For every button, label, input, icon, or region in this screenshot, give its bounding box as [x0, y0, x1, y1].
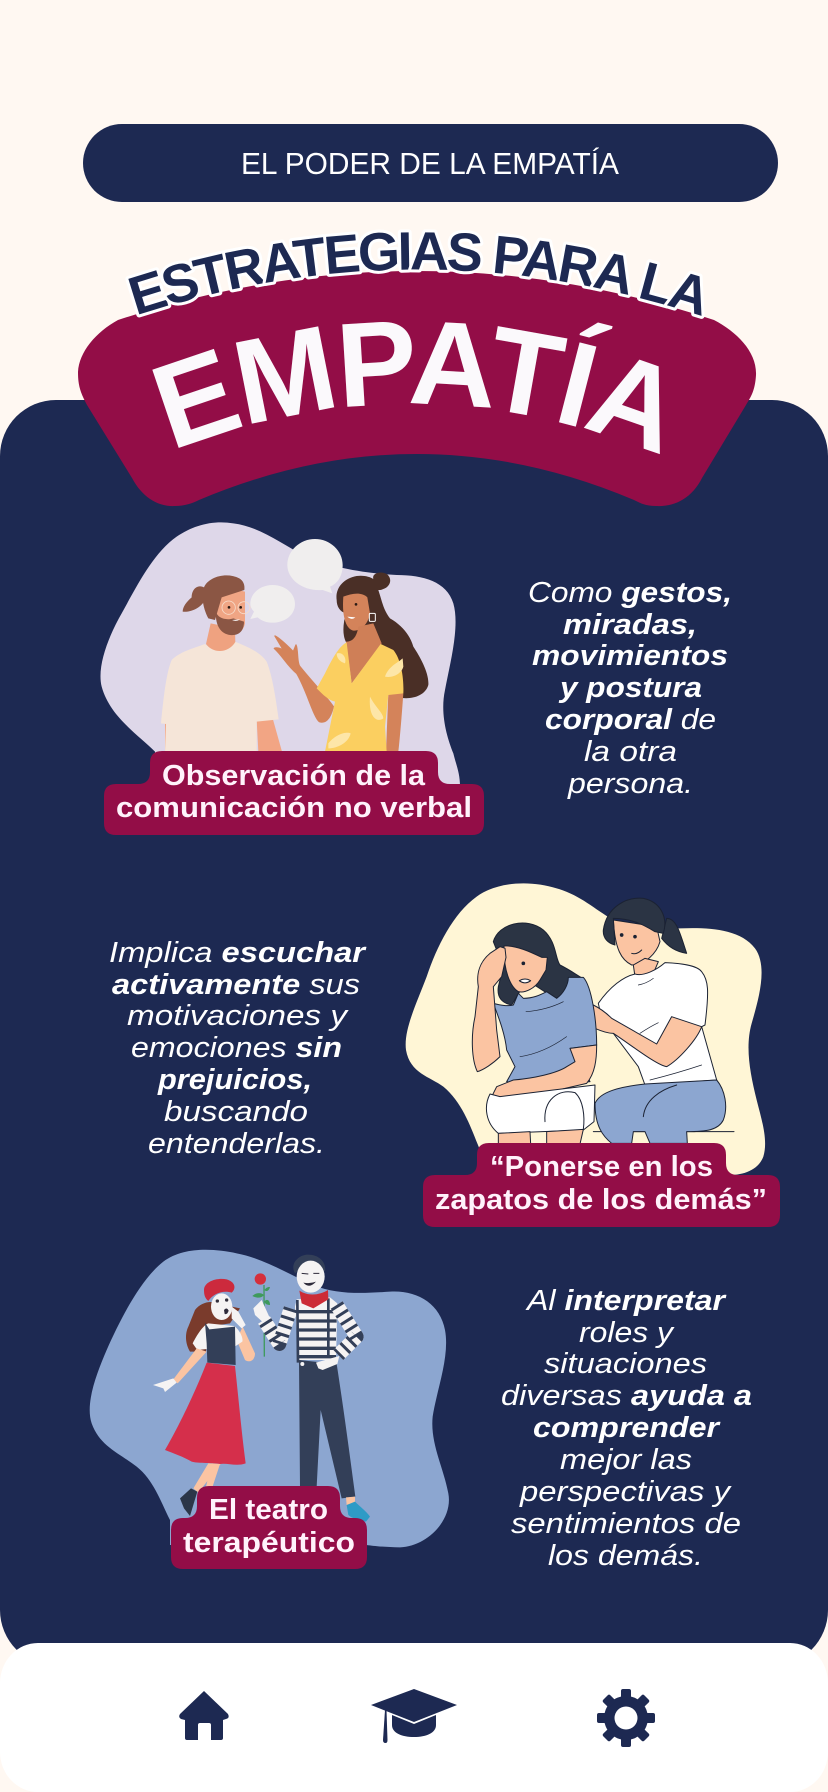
- title line: EMPATÍA: EMPATÍA: [152, 322, 660, 454]
- icon: graduation cap: [371, 1689, 457, 1743]
- woman mime: [153, 1279, 255, 1516]
- text block: comunicación no verbal description: movimientos: [532, 640, 728, 672]
- label: Observación de la comunicación no verbal: comunicación no verbal: [116, 792, 472, 824]
- text block: escucha activa description: buscando: [164, 1096, 308, 1128]
- left woman: [472, 923, 597, 1144]
- bottom navigation panel: [0, 1643, 828, 1792]
- text block: teatro description: [501, 1285, 752, 1572]
- illustration: two seated women: [406, 883, 765, 1175]
- title banner: [78, 230, 756, 506]
- label: Observación de la comunicación no verbal: [104, 751, 484, 835]
- text block: teatro description: Al interpretar: [525, 1285, 727, 1317]
- blob: [100, 522, 460, 787]
- blob: [406, 883, 765, 1175]
- label: Ponerse en los zapatos de los demás: [423, 1143, 780, 1227]
- text block: teatro description: situaciones: [544, 1348, 707, 1380]
- illustration: mimes with a rose: [90, 1250, 449, 1547]
- text block: comunicación no verbal description: y postura: [558, 672, 702, 704]
- speech bubble small: [250, 585, 295, 623]
- speech bubble large: [287, 539, 343, 593]
- header pill: EL PODER DE LA EMPATÍA: [241, 146, 619, 181]
- text block: comunicación no verbal description: [528, 577, 732, 800]
- man: [161, 575, 282, 752]
- label: El teatro terapéutico: [171, 1486, 367, 1569]
- text block: comunicación no verbal description: persona.: [567, 768, 693, 800]
- woman: [274, 573, 428, 752]
- right woman: [578, 898, 726, 1143]
- label: Observación de la comunicación no verbal: Observación de la: [162, 760, 426, 792]
- section 1: blob with conversation illustration: [100, 522, 484, 835]
- text block: teatro description: mejor las: [560, 1444, 692, 1476]
- label: Ponerse en los zapatos de los demás: zapatos de los demás”: [435, 1184, 767, 1216]
- text block: escucha activa description: emociones sin: [131, 1032, 342, 1064]
- text block: escucha activa description: Implica escuchar: [109, 937, 367, 969]
- text block: escucha activa description: [109, 937, 367, 1160]
- panel: navy main background: [0, 400, 828, 1666]
- text block: escucha activa description: prejuicios,: [157, 1064, 312, 1096]
- text block: teatro description: roles y: [579, 1317, 675, 1349]
- text block: comunicación no verbal description: corporal de: [545, 704, 716, 736]
- text block: escucha activa description: activamente sus: [112, 969, 360, 1001]
- bench: [593, 1130, 734, 1133]
- text block: teatro description: diversas ayuda a: [501, 1380, 752, 1412]
- text block: teatro description: perspectivas y: [519, 1476, 732, 1508]
- label: El teatro terapéutico: El teatro: [209, 1494, 328, 1526]
- text block: escucha activa description: entenderlas.: [148, 1128, 325, 1160]
- label: El teatro terapéutico: terapéutico: [183, 1527, 355, 1559]
- blob: [90, 1250, 449, 1547]
- section 2: blob with comforting illustration: [406, 883, 780, 1227]
- text block: comunicación no verbal description: miradas,: [563, 609, 697, 641]
- text block: comunicación no verbal description: la otra: [584, 736, 677, 768]
- rose: [252, 1273, 270, 1357]
- text block: teatro description: los demás.: [548, 1540, 703, 1572]
- section 3: blob with mime illustration: [90, 1250, 449, 1569]
- icon: gear: [597, 1689, 655, 1747]
- header pill: [83, 124, 778, 202]
- text block: teatro description: sentimientos de: [511, 1508, 741, 1540]
- text block: escucha activa description: motivaciones y: [127, 1000, 349, 1032]
- icon: home: [179, 1691, 229, 1740]
- title line: ESTRATEGIAS PARA LA: ESTRATEGIAS PARA LA: [126, 230, 704, 319]
- label: Ponerse en los zapatos de los demás: “Ponerse en los: [490, 1151, 713, 1183]
- text block: teatro description: comprender: [533, 1412, 721, 1444]
- man mime: [253, 1255, 370, 1522]
- text block: comunicación no verbal description: Como gestos,: [528, 577, 732, 609]
- banner shape: [78, 271, 756, 506]
- illustration: man and woman talking: [100, 522, 460, 787]
